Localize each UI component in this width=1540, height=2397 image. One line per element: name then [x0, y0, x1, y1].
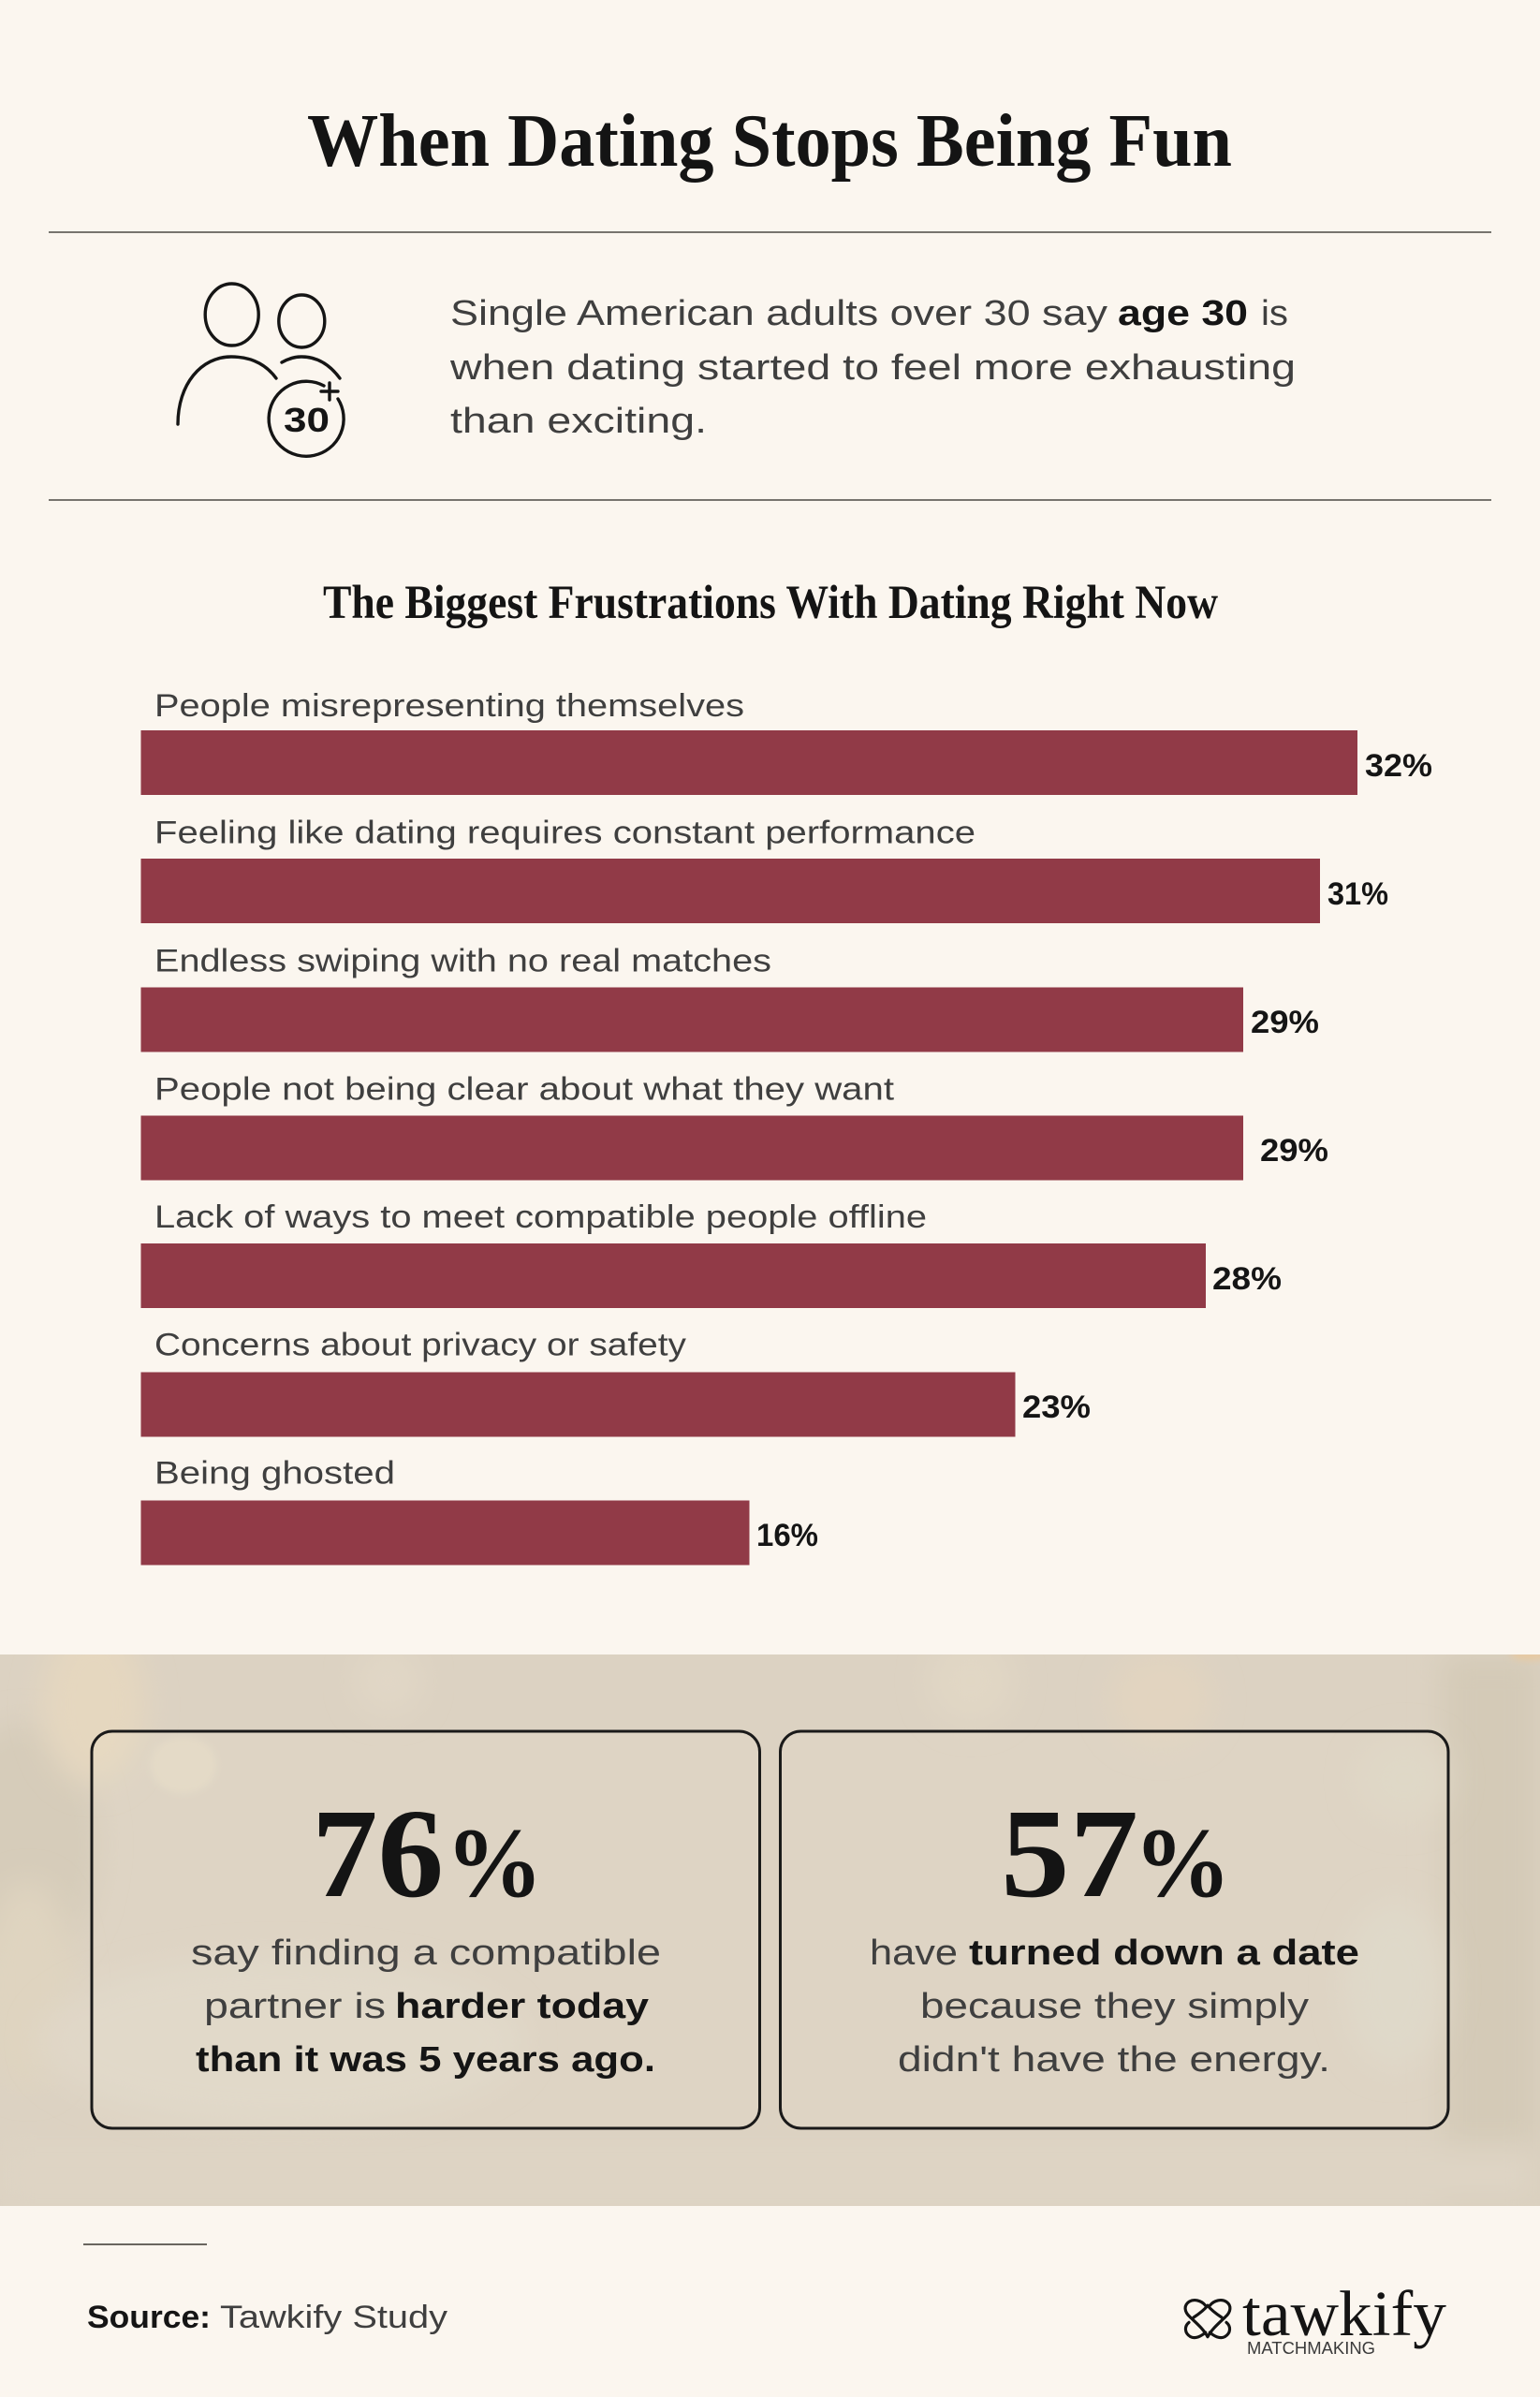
stat text 57%: didn't have the energy.	[898, 2040, 1330, 2080]
icon: two people with 30+ badge: 30	[284, 401, 330, 439]
intro text	[449, 294, 1296, 441]
bar row: privacy 23%: Concerns about privacy or safety	[154, 1328, 686, 1363]
stat number 57%: %	[1134, 1808, 1231, 1918]
intro text: age 30	[1118, 294, 1248, 333]
source note	[87, 2300, 447, 2335]
bar row: not clear 29%: People not being clear about what they want	[154, 1071, 895, 1107]
stat text 57%: have	[870, 1934, 958, 1973]
bar row: misrepresenting 32%: People misrepresenting themselves	[154, 688, 744, 724]
bar row: offline 28%: Lack of ways to meet compatible people offline	[154, 1199, 927, 1235]
source note: Source:	[87, 2300, 211, 2335]
panel: stat 57%	[781, 1731, 1448, 2128]
logo: tawkify matchmaking	[1185, 2278, 1447, 2358]
decorative bokeh	[150, 1736, 217, 1794]
bar row: not clear 29%: 29%	[1260, 1133, 1328, 1169]
stat number 57%: 57	[1001, 1784, 1138, 1924]
bar row: misrepresenting 32%: 32%	[1365, 748, 1432, 784]
stat number 76%: %	[446, 1808, 543, 1918]
bar row: ghosted 16%: Being ghosted	[154, 1455, 395, 1491]
intro text: than exciting.	[450, 402, 707, 441]
stat text 76%: than it was 5 years ago.	[196, 2040, 655, 2080]
bar row: performance 31%	[140, 815, 1388, 923]
chart heading: The Biggest Frustrations With Dating Right Now	[323, 577, 1218, 629]
panel: blurred beige background	[0, 1625, 1540, 2206]
bar row: privacy 23%: 23%	[1022, 1390, 1091, 1425]
bar row: offline 28%	[140, 1199, 1282, 1308]
intro text: Single American adults over 30 say	[450, 294, 1107, 333]
stat text 76%: say finding a compatible	[191, 1934, 661, 1973]
bar row: swiping 29%	[140, 944, 1319, 1052]
stat text 57%: turned down a date	[969, 1934, 1359, 1973]
bar row: offline 28%: 28%	[1212, 1261, 1282, 1297]
bar chart: biggest frustrations	[140, 688, 1432, 1566]
bar row: swiping 29%: Endless swiping with no real matches	[154, 944, 771, 979]
bar row: ghosted 16%: 16%	[756, 1518, 818, 1553]
bar row: performance 31%: 31%	[1327, 876, 1388, 912]
bar row: privacy 23%	[140, 1328, 1091, 1436]
stat number 57%	[1001, 1784, 1231, 1924]
intro text: is	[1261, 294, 1288, 333]
icon: two people with 30+ badge	[178, 284, 344, 456]
stat text 57%	[870, 1934, 1359, 2080]
source note: Tawkify Study	[220, 2300, 447, 2335]
stat text 76%: harder today	[395, 1987, 649, 2026]
bar row: ghosted 16%	[140, 1455, 818, 1566]
logo: tawkify matchmaking: MATCHMAKING	[1247, 2339, 1375, 2358]
stat text 76%: partner is	[204, 1987, 386, 2026]
logo: tawkify matchmaking: tawkify	[1242, 2278, 1447, 2349]
bar row: not clear 29%	[140, 1071, 1328, 1180]
title: When Dating Stops Being Fun	[307, 100, 1232, 183]
bar row: swiping 29%: 29%	[1251, 1005, 1319, 1040]
stat text 76%	[191, 1934, 661, 2080]
stat number 76%: 76	[312, 1784, 444, 1924]
bar row: misrepresenting 32%	[140, 688, 1432, 795]
icon: interlaced hearts	[1185, 2301, 1230, 2338]
panel: stat 76%	[92, 1731, 760, 2128]
stat number 76%	[312, 1784, 543, 1924]
bar row: performance 31%: Feeling like dating requires constant performance	[154, 815, 975, 850]
intro text: when dating started to feel more exhausting	[449, 348, 1296, 388]
stat text 57%: because they simply	[920, 1987, 1309, 2026]
